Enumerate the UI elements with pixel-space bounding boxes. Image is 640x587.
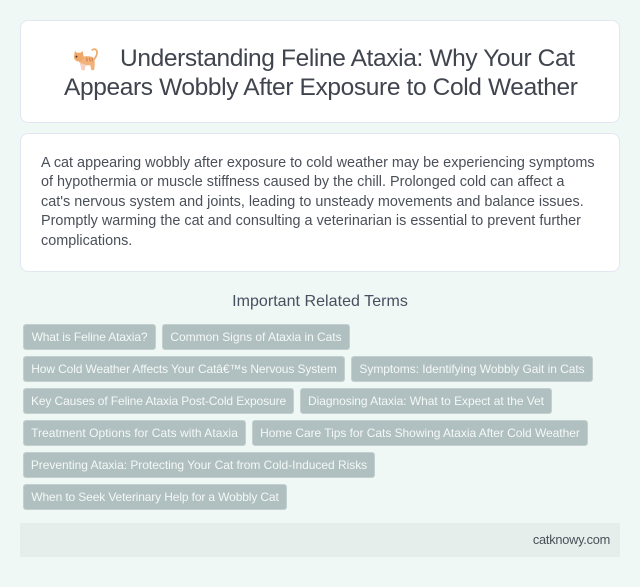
term	[300, 388, 552, 414]
footer site name: catknowy.com	[533, 532, 610, 547]
term: Key Causes of Feline Ataxia Post-Cold Exposure	[31, 394, 286, 408]
term: Symptoms: Identifying Wobbly Gait in Cats	[359, 362, 585, 376]
term: Common Signs of Ataxia in Cats	[170, 330, 342, 344]
heading: related terms: Important Related Terms	[232, 293, 408, 310]
term	[252, 420, 588, 446]
description text: Promptly warming the cat and consulting a veterinarian is essential to prevent further	[41, 213, 581, 229]
term	[23, 356, 345, 382]
footer	[20, 523, 620, 557]
term	[23, 484, 287, 510]
description text	[41, 155, 595, 249]
term	[351, 356, 593, 382]
term	[23, 452, 375, 478]
title line 2: Appears Wobbly After Exposure to Cold Weather	[64, 74, 578, 101]
term: Treatment Options for Cats with Ataxia	[31, 426, 238, 440]
term: Diagnosing Ataxia: What to Expect at the Vet	[308, 394, 544, 408]
icon: cat	[74, 48, 98, 70]
panel: title card	[20, 20, 620, 123]
term: Preventing Ataxia: Protecting Your Cat from Cold-Induced Risks	[31, 458, 367, 472]
term: How Cold Weather Affects Your Catâ€™s Nervous System	[31, 362, 337, 376]
title line 1: Understanding Feline Ataxia: Why Your Cat	[120, 45, 575, 72]
term	[23, 420, 246, 446]
description text: complications.	[41, 233, 132, 249]
related terms list	[23, 324, 593, 510]
description text: A cat appearing wobbly after exposure to cold weather may be experiencing symptoms	[41, 155, 595, 171]
term: What is Feline Ataxia?	[32, 330, 147, 344]
description text: of hypothermia or muscle stiffness caused by the chill. Prolonged cold can affect a	[41, 174, 564, 190]
term	[23, 324, 156, 350]
term	[23, 388, 294, 414]
panel: description	[20, 133, 620, 272]
term: Home Care Tips for Cats Showing Ataxia After Cold Weather	[260, 426, 580, 440]
term	[162, 324, 350, 350]
description text: cat's nervous system and joints, leading to unsteady movements and balance issues.	[41, 194, 584, 210]
term: When to Seek Veterinary Help for a Wobbly Cat	[31, 490, 279, 504]
